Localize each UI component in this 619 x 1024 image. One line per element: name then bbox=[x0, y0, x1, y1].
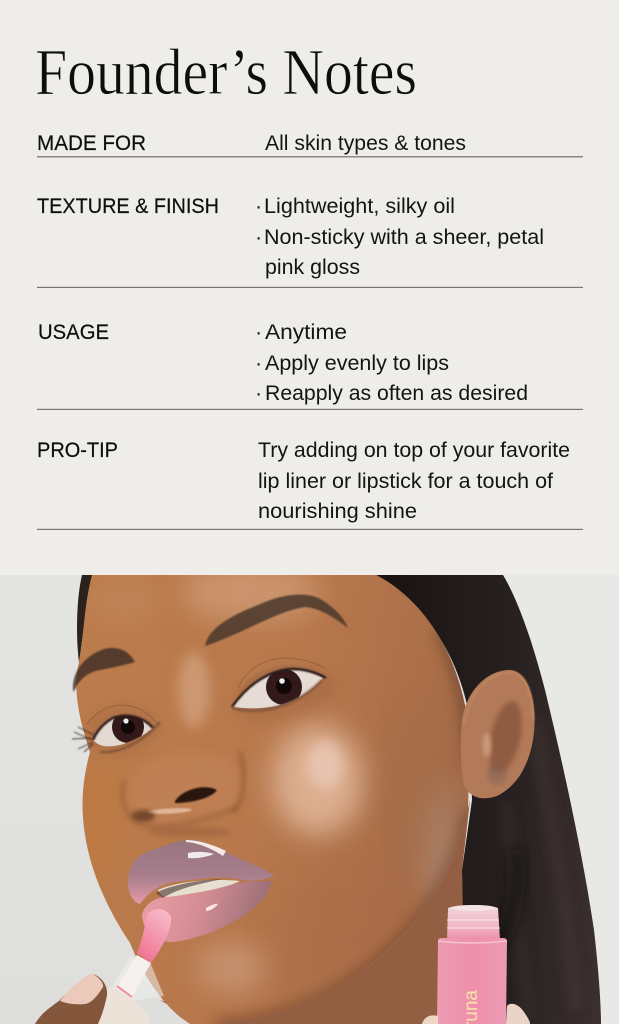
row value: texture and finish: · bbox=[255, 225, 262, 249]
table row: usage bbox=[37, 320, 583, 410]
gloss highlights bbox=[186, 840, 226, 856]
face bbox=[76, 575, 468, 1024]
pink applicator tip bbox=[137, 909, 171, 963]
upper lip bbox=[128, 840, 274, 904]
row value: texture and finish bbox=[255, 194, 544, 279]
background panel bbox=[0, 0, 619, 575]
row value: texture and finish: Non-sticky with a sheer, petal bbox=[264, 225, 544, 249]
row value: usage: · bbox=[255, 351, 262, 375]
ear bbox=[461, 670, 535, 798]
bottle neck bbox=[447, 905, 500, 940]
row value: usage bbox=[255, 320, 528, 405]
teeth bbox=[158, 880, 240, 897]
title: Founder’s Notes bbox=[35, 36, 417, 109]
photo: model applying lip gloss bbox=[0, 562, 619, 1024]
white stem bbox=[117, 955, 151, 997]
finger holding applicator bbox=[35, 974, 107, 1024]
row value: usage: · bbox=[255, 381, 262, 405]
left eye bbox=[72, 705, 160, 752]
row label: made for: MADE FOR bbox=[37, 132, 146, 155]
table row: pro-tip bbox=[37, 438, 583, 530]
neck bbox=[160, 800, 470, 1024]
translucent wand shaft bbox=[112, 956, 164, 1000]
left eyebrow bbox=[73, 648, 135, 692]
applicator wand bbox=[97, 909, 171, 1024]
row value: pro-tip: Try adding on top of your favorite bbox=[258, 438, 570, 462]
right eyebrow bbox=[205, 595, 348, 646]
table row: made for bbox=[37, 131, 583, 158]
row value: texture and finish: · bbox=[255, 194, 262, 218]
hair bbox=[77, 575, 601, 1024]
lower lip bbox=[142, 881, 272, 942]
row label: texture and finish: TEXTURE & FINISH bbox=[37, 195, 219, 218]
cap bbox=[97, 986, 150, 1024]
row value: usage: Reapply as often as desired bbox=[265, 381, 528, 405]
row value: usage: · bbox=[255, 320, 262, 344]
nose bbox=[122, 752, 244, 837]
row value: pro-tip: lip liner or lipstick for a touch of bbox=[258, 469, 553, 493]
fingers holding bottle bbox=[422, 1004, 530, 1024]
table row: texture and finish bbox=[37, 194, 583, 288]
row label: usage: USAGE bbox=[38, 321, 109, 344]
row label: pro-tip: PRO-TIP bbox=[37, 439, 118, 462]
lip gloss bottle bbox=[437, 905, 507, 1024]
row value: pro-tip: nourishing shine bbox=[258, 499, 417, 523]
lips bbox=[128, 840, 274, 942]
row value: texture and finish: Lightweight, silky oil bbox=[264, 194, 455, 218]
row value: made for: All skin types & tones bbox=[265, 131, 466, 155]
row value: usage: Apply evenly to lips bbox=[265, 351, 449, 375]
right eye bbox=[232, 658, 326, 711]
row value: texture and finish: pink gloss bbox=[265, 255, 360, 279]
skin shading bbox=[78, 562, 470, 1024]
row value: pro-tip bbox=[258, 438, 570, 523]
row value: usage: Anytime bbox=[265, 320, 347, 344]
bottle body bbox=[437, 938, 507, 1024]
